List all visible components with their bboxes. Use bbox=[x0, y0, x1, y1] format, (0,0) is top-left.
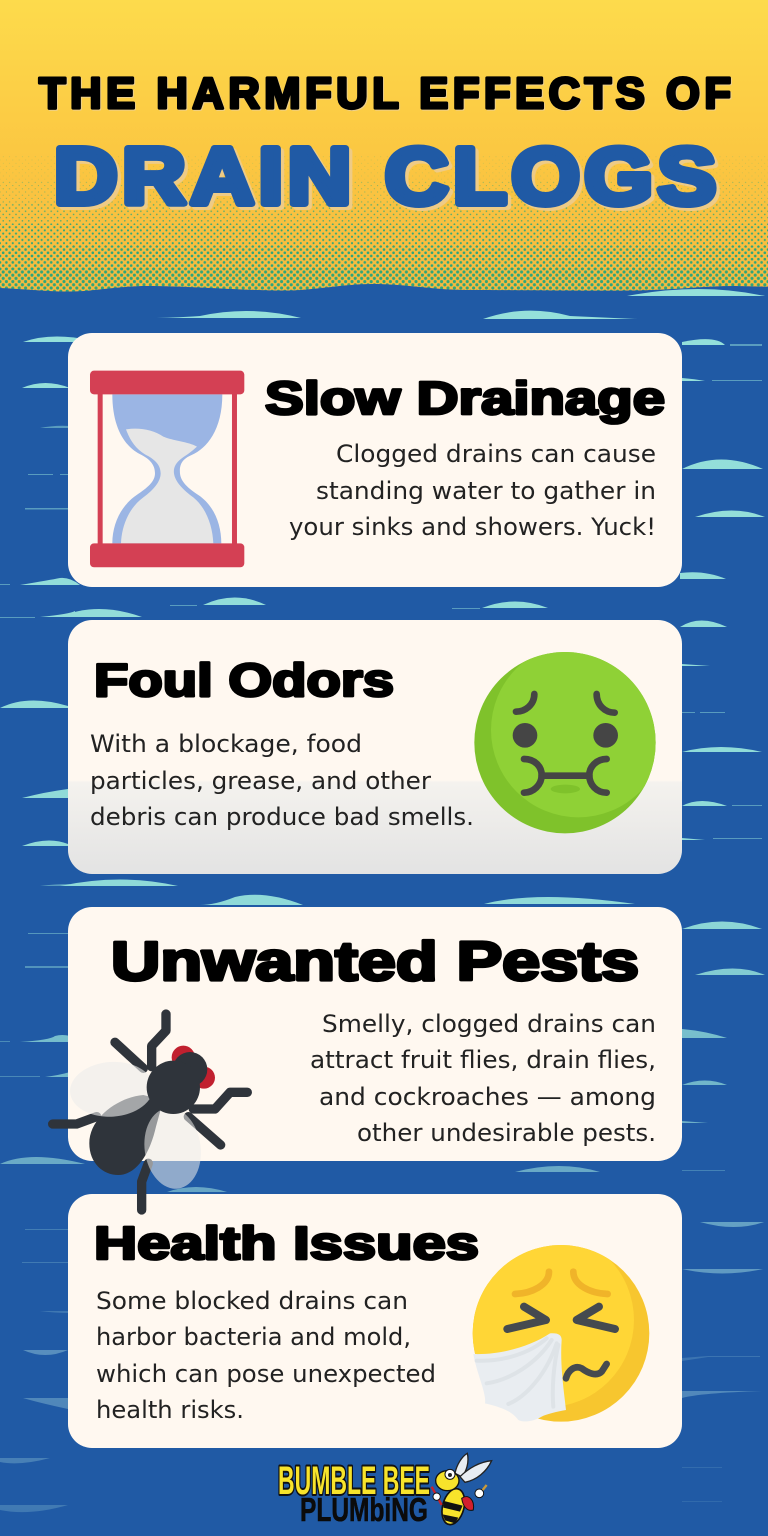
body text: Some blocked drains can bbox=[96, 1287, 408, 1315]
body text: attract fruit flies, drain flies, bbox=[310, 1046, 656, 1074]
icon: nauseated face bbox=[474, 643, 666, 833]
icon: bee mascot bbox=[432, 1453, 492, 1527]
heading: Slow Drainage bbox=[265, 372, 665, 424]
heading: Foul Odors bbox=[94, 654, 394, 706]
body text: Smelly, clogged drains can bbox=[322, 1010, 656, 1038]
logo: Bumble Bee Plumbing bbox=[278, 1453, 492, 1528]
body text bbox=[289, 440, 656, 541]
heading: Health Issues bbox=[94, 1217, 479, 1269]
body text bbox=[310, 1010, 656, 1147]
heading: Unwanted Pests bbox=[111, 930, 639, 992]
panel: slow drainage bbox=[68, 333, 682, 587]
header background with halftone bbox=[0, 0, 768, 300]
title line: Drain Clogs: DRAIN CLOGS bbox=[54, 131, 716, 221]
body text: standing water to gather in bbox=[316, 477, 656, 505]
icon: sneezing face bbox=[472, 1245, 650, 1422]
body text: With a blockage, food bbox=[90, 730, 362, 758]
panel: foul odors bbox=[68, 620, 682, 874]
body text bbox=[96, 1287, 436, 1424]
body text bbox=[90, 730, 474, 831]
icon: hourglass bbox=[90, 371, 244, 567]
title line: The Harmful Effects Of: THE HARMFUL EFFECTS OF bbox=[39, 70, 731, 118]
panel: health issues bbox=[68, 1194, 682, 1448]
body text: harbor bacteria and mold, bbox=[96, 1323, 411, 1351]
body text: your sinks and showers. Yuck! bbox=[289, 513, 656, 541]
body text: debris can produce bad smells. bbox=[90, 803, 474, 831]
logo: Bumble Bee Plumbing: PLUMbiNG bbox=[300, 1491, 428, 1528]
body text: health risks. bbox=[96, 1396, 244, 1424]
icon: fly bbox=[53, 1014, 247, 1210]
body text: and cockroaches — among bbox=[319, 1083, 656, 1111]
body text: particles, grease, and other bbox=[90, 767, 431, 795]
body text: other undesirable pests. bbox=[357, 1119, 656, 1147]
body text: Clogged drains can cause bbox=[336, 440, 656, 468]
logo: Bumble Bee Plumbing: BUMBLE BEE bbox=[278, 1459, 430, 1503]
panel: unwanted pests bbox=[68, 907, 682, 1161]
body text: which can pose unexpected bbox=[96, 1360, 436, 1388]
